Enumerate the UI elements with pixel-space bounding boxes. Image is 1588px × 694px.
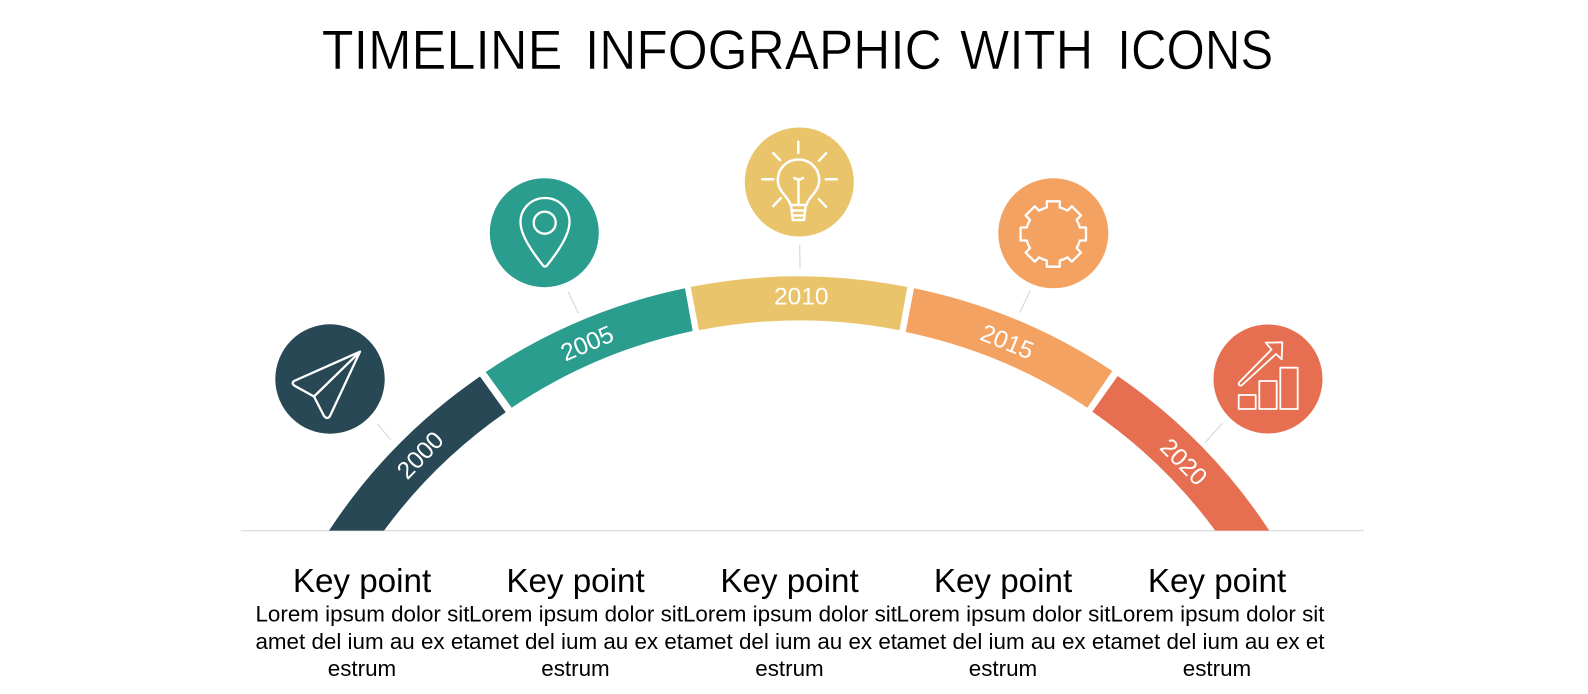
icon: paper plane (275, 324, 391, 440)
text block: key point 5: amet del ium au ex et (1110, 629, 1325, 654)
arc segment: 2010 (691, 276, 907, 330)
title: WITH (960, 18, 1093, 81)
text block: key point 3: estrum (755, 656, 824, 681)
arc segment: 2000: 2000 (392, 427, 449, 485)
text block: key point 4: estrum (969, 656, 1037, 681)
arc segment: 2020: 2020 (1154, 434, 1212, 491)
text block: key point 3: Key point (720, 563, 859, 600)
text block: key point 1: Key point (293, 563, 431, 600)
arc segment: 2020 (1092, 376, 1269, 531)
text block: key point 1: amet del ium au ex et (255, 629, 470, 654)
text block: key point 4: Key point (934, 563, 1072, 600)
text block: key point 2: Lorem ipsum dolor sit (469, 602, 684, 627)
title: TIMELINE (322, 18, 562, 81)
text block: key point 2: Key point (506, 563, 645, 600)
text block: key point 5: estrum (1183, 656, 1251, 681)
arc segment: 2005: 2005 (557, 321, 618, 367)
title (322, 18, 1273, 81)
arc segment: 2000 (329, 376, 506, 531)
text block: key point 5: Key point (1148, 563, 1286, 600)
icon: gear (998, 178, 1108, 312)
text block: key point 3: Lorem ipsum dolor sit (683, 602, 898, 627)
text block: key point 1 (255, 563, 470, 681)
arc segment: 2010: 2010 (774, 284, 829, 311)
text block: key point 2: estrum (541, 656, 610, 681)
text block: key point 1: Lorem ipsum dolor sit (255, 602, 470, 627)
title: INFOGRAPHIC (585, 18, 942, 81)
text block: key point 3 (683, 563, 898, 681)
text block: key point 5: Lorem ipsum dolor sit (1110, 602, 1325, 627)
text block: key point 3: amet del ium au ex et (683, 629, 898, 654)
text block: key point 1: estrum (328, 656, 396, 681)
text block: key point 2 (469, 563, 684, 681)
text block: key point 4 (896, 563, 1111, 681)
icon: light bulb (745, 128, 854, 268)
title: ICONS (1117, 18, 1273, 81)
arc segment: 2005 (486, 288, 693, 408)
text block: key point 4: amet del ium au ex et (896, 629, 1111, 654)
text block: key point 4: Lorem ipsum dolor sit (896, 602, 1111, 627)
text block: key point 2: amet del ium au ex et (469, 629, 684, 654)
text block: key point 5 (1110, 563, 1325, 681)
arc segment: 2015 (906, 288, 1112, 408)
icon: growth chart (1205, 324, 1322, 443)
icon: location pin (490, 178, 599, 313)
arc segment: 2015: 2015 (977, 320, 1037, 365)
